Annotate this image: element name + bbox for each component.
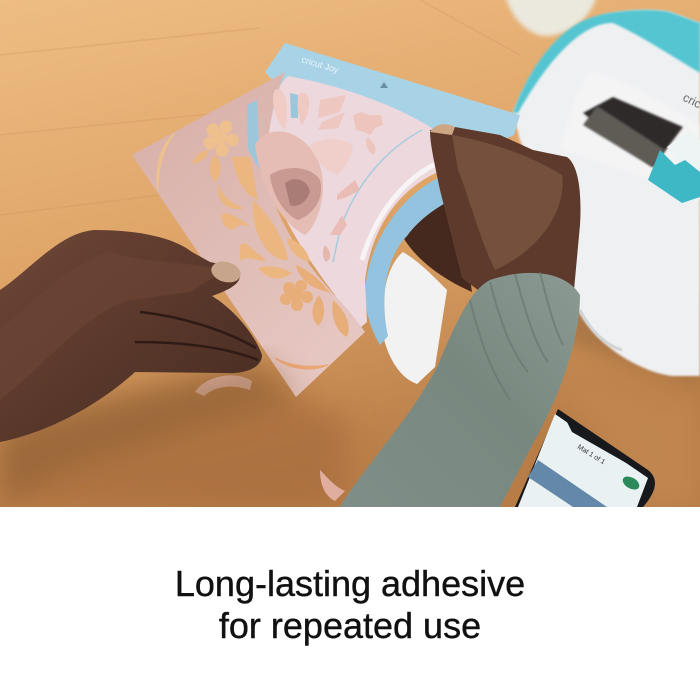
- right hand: [430, 124, 580, 290]
- photo: hands peeling a pink stencil from a blue mat beside a cutting machine: [0, 0, 700, 507]
- curled blue mat band: [365, 172, 457, 345]
- blue cutting mat top: cricut Joy: [300, 54, 340, 75]
- phone body: [515, 409, 655, 507]
- caption heading: [175, 563, 525, 646]
- moon cutout top: [157, 133, 175, 190]
- green pill: [620, 474, 642, 492]
- paper scraps: [195, 375, 345, 501]
- curled pale sheet: [262, 76, 449, 335]
- phone screen: [518, 414, 648, 507]
- slot opening: [560, 72, 700, 200]
- black rollers: [583, 97, 683, 167]
- leaf cutouts: [192, 150, 310, 278]
- right thumbnail: [430, 124, 455, 135]
- teal clip: [648, 150, 700, 203]
- cutting machine: [513, 10, 700, 385]
- blue strip: [528, 460, 607, 507]
- teal lid: [513, 10, 700, 113]
- wooden table: [0, 0, 700, 507]
- grey knit sleeve: [340, 272, 580, 507]
- caption heading: for repeated use: [219, 605, 481, 646]
- left hand: [0, 230, 300, 505]
- flower cutout top: [204, 120, 238, 156]
- thumbnail: [209, 258, 243, 286]
- flower and leaf cutouts bottom: [280, 265, 349, 337]
- caption heading: Long-lasting adhesive: [175, 563, 525, 604]
- moon cutout bottom: [275, 358, 328, 369]
- front lip: [580, 310, 622, 350]
- white clip: [667, 130, 700, 168]
- machine body: [513, 10, 700, 376]
- fingers behind the mat: [403, 188, 472, 292]
- blue mat showing through: [247, 93, 298, 170]
- phone: [515, 409, 655, 507]
- peeled rose and petals: [255, 89, 383, 262]
- screen text: Mat 1 of 1: [576, 444, 606, 466]
- white roller: [382, 252, 447, 384]
- machine shadow: [560, 280, 700, 385]
- notch: [566, 420, 640, 468]
- cup in the background: [505, 0, 597, 36]
- pink stencil sheet: [132, 72, 365, 397]
- blue cutting mat top: [265, 43, 520, 170]
